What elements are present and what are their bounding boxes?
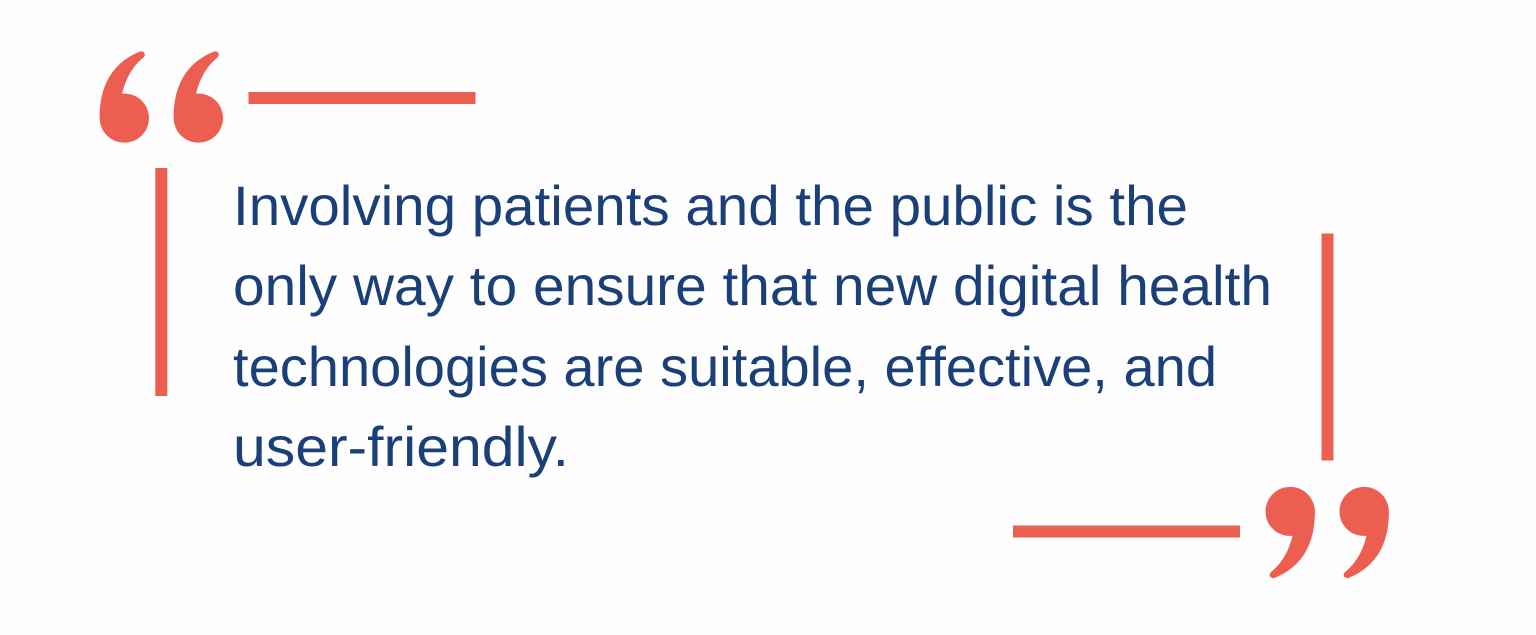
right vertical rule xyxy=(1322,234,1334,460)
quote text: technologies are suitable, effective, and xyxy=(233,335,1217,398)
quote text xyxy=(233,174,1272,478)
bottom horizontal rule xyxy=(1013,526,1240,538)
top horizontal rule xyxy=(248,92,476,104)
quote text: Involving patients and the public is the xyxy=(233,174,1188,237)
quote text: only way to ensure that new digital health xyxy=(233,254,1272,317)
left vertical rule xyxy=(155,168,167,396)
icon: closing quotation mark xyxy=(1266,487,1389,578)
icon: opening quotation mark xyxy=(100,51,223,143)
quote text: user-friendly. xyxy=(233,415,569,478)
